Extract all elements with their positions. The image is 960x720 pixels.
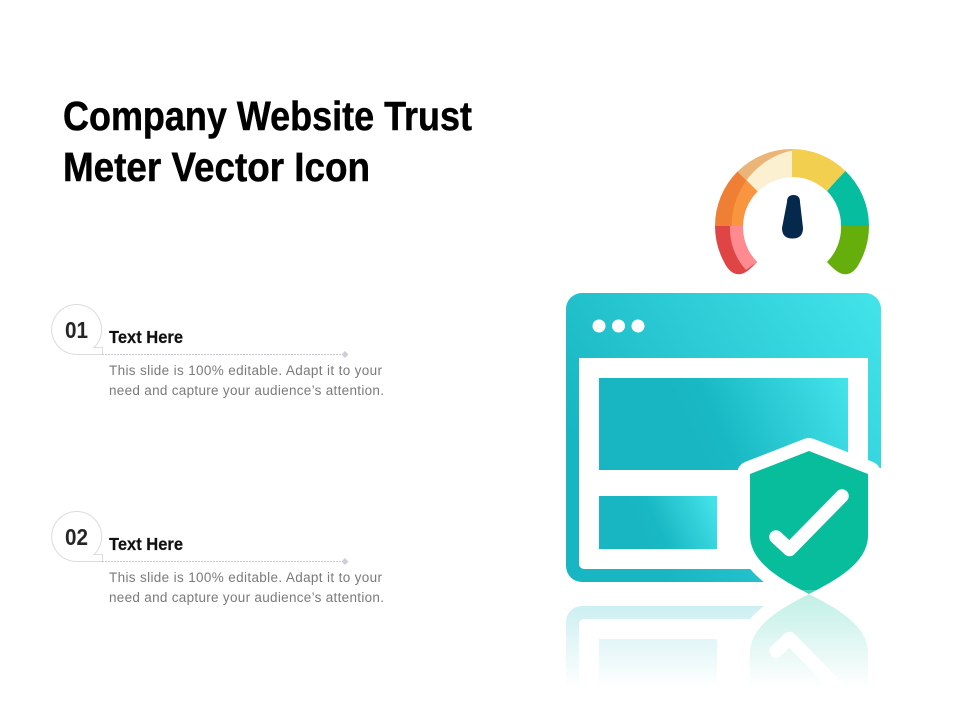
item 02 body text: need and capture your audience’s attention.: [109, 590, 384, 605]
browser content area: [579, 358, 868, 569]
browser frame: [566, 293, 881, 582]
number badge 01: [52, 305, 102, 355]
gauge: red segment: [715, 226, 757, 274]
item 01 body text: [109, 363, 384, 398]
check mark: [776, 496, 842, 550]
item 02 body text: [109, 570, 384, 605]
gauge: yellow segment: [792, 149, 846, 191]
number badge 02: [52, 512, 102, 562]
content block: small: [599, 496, 717, 549]
icon: trust meter gauge: [715, 149, 869, 274]
gauge: orange segment: [715, 172, 758, 226]
item 02: [52, 512, 384, 605]
item 01 body text: need and capture your audience’s attention.: [109, 383, 384, 398]
item 01 divider: [102, 351, 348, 358]
item 01: [52, 305, 384, 398]
item 02 heading: Text Here: [109, 534, 183, 554]
item 01 body text: This slide is 100% editable. Adapt it to your: [109, 363, 382, 378]
icon: browser window with shield: [566, 293, 885, 594]
item 02 divider: [102, 558, 348, 565]
browser dots: [592, 320, 644, 332]
item 02 body text: This slide is 100% editable. Adapt it to your: [109, 570, 382, 585]
gauge: green segment: [827, 226, 869, 274]
gauge: needle: [782, 195, 803, 238]
content block: large: [599, 378, 848, 470]
shield white outline: [750, 451, 885, 594]
number badge 02: 02: [65, 524, 88, 550]
title: Meter Vector Icon: [63, 144, 370, 190]
number badge 01: 01: [65, 317, 88, 343]
item 01 heading: Text Here: [109, 327, 183, 347]
gauge: cream segment: [738, 149, 792, 192]
title: Company Website Trust: [63, 93, 472, 139]
reflection of browser and shield: [566, 590, 868, 676]
gauge: teal segment: [827, 170, 869, 226]
shield: [750, 451, 868, 594]
title: [63, 93, 472, 190]
